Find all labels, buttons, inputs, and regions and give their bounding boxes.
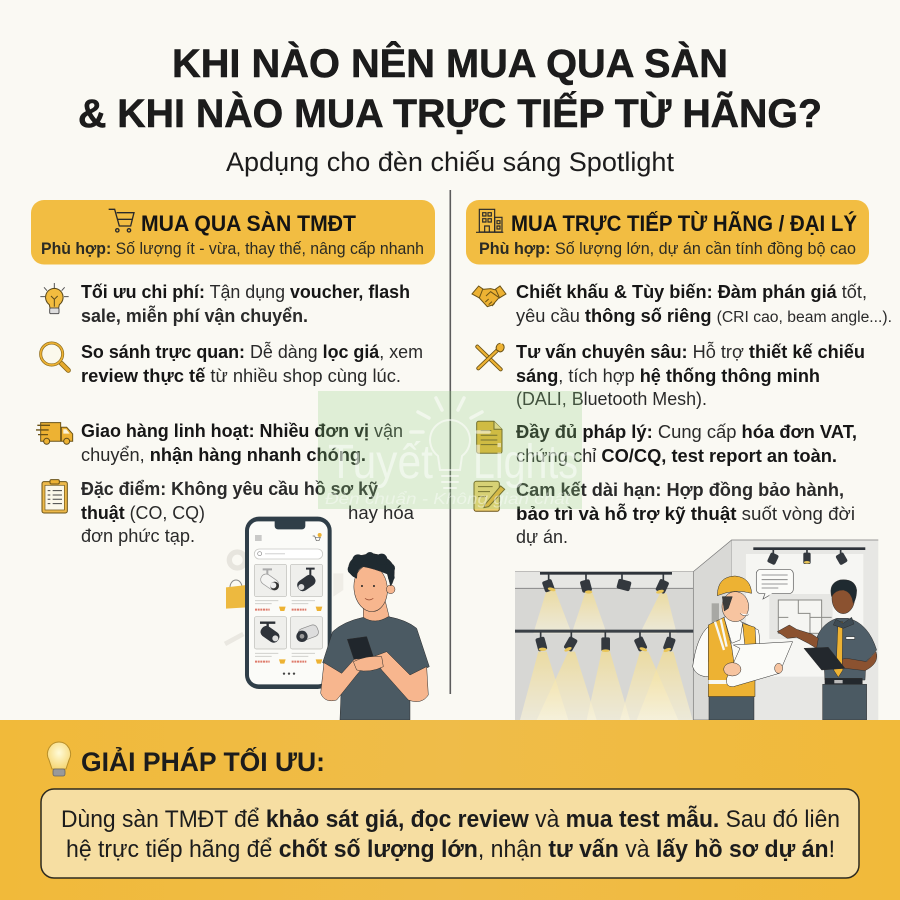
title: & KHI NÀO MUA TRỰC TIẾP TỪ HÃNG? [78, 90, 822, 136]
solution box [41, 789, 859, 878]
panel: right header: MUA TRỰC TIẾP TỪ HÃNG / ĐẠI LÝ [511, 211, 857, 236]
person [321, 552, 429, 720]
panel: left benefits list: hay hóa [348, 503, 415, 523]
benefit text: long term: Cam kết dài hạn: Hợp đồng bảo hành, [516, 480, 844, 500]
benefit text: discount: Chiết khấu & Tùy biến: Đàm phán giá tốt, [516, 282, 867, 302]
solution heading: GIẢI PHÁP TỐI ƯU: [81, 745, 325, 777]
track rails [515, 547, 865, 633]
icon: building [476, 209, 503, 232]
center divider [450, 190, 451, 694]
panel: left benefits list: thuật (CO, CQ) [81, 503, 205, 523]
watermark logo: Tuyết [328, 436, 433, 489]
panel: right benefits list: yêu cầu thông số riêng (CRI cao, beam angle...). [516, 306, 892, 326]
icon: document [477, 421, 502, 453]
product spotlights [259, 569, 320, 645]
panel: right benefits list: dự án. [516, 527, 568, 547]
panel: right header: Phù hợp: Số lượng lớn, dự án cần tính đồng bộ cao [479, 240, 856, 258]
track spotlights [535, 549, 848, 653]
icon: magnifier [41, 343, 68, 370]
panel: left header: MUA QUA SÀN TMĐT [141, 211, 356, 236]
room walls [515, 540, 878, 720]
icon: light bulb [40, 283, 69, 314]
icon: shopping cart [109, 209, 134, 232]
panel: right benefits list: (DALI, Bluetooth Mesh). [516, 389, 707, 409]
panel: right header [466, 200, 869, 264]
watermark logo: Lights [473, 436, 578, 489]
title [78, 40, 822, 136]
subtitle: Apdụng cho đèn chiếu sáng Spotlight [226, 147, 674, 177]
icon: note with pencil [474, 481, 505, 511]
panel: left benefits list [36, 282, 423, 546]
watermark bulb [411, 398, 489, 488]
light beams [520, 590, 693, 720]
panel: optimal solution band [0, 720, 900, 900]
solution box: hệ trực tiếp hãng để chốt số lượng lớn, nhận tư vấn và lấy hồ sơ dự án! [66, 836, 835, 863]
benefit text: legal: Đầy đủ pháp lý: Cung cấp hóa đơn VAT, [516, 422, 857, 442]
panel: right benefits list: chứng chỉ CO/CQ, test report an toàn. [516, 446, 837, 466]
illustration: showroom with engineer and consultant [515, 540, 878, 720]
icon: handshake [472, 286, 506, 307]
icon: glowing bulb [47, 742, 71, 776]
shopping bag [226, 580, 247, 609]
panel: left benefits list: đơn phức tạp. [81, 526, 195, 546]
benefit text: consulting: Tư vấn chuyên sâu: Hỗ trợ thiết kế chiếu [516, 341, 865, 362]
watermark logo [318, 391, 582, 509]
product cards [254, 564, 323, 649]
solution box: Dùng sàn TMĐT để khảo sát giá, đọc review và mua test mẫu. Sau đó liên [61, 805, 840, 833]
engineer [693, 576, 793, 720]
panel: left benefits list: chuyển, nhận hàng nhanh chóng. [81, 445, 366, 465]
benefit text: features: Đặc điểm: Không yêu cầu hồ sơ kỹ [81, 479, 378, 499]
floor plan [769, 594, 833, 639]
benefit text: compare: So sánh trực quan: Dễ dàng lọc giá, xem [81, 341, 423, 362]
icon: clipboard [42, 480, 67, 513]
benefit text: delivery: Giao hàng linh hoạt: Nhiều đơn vị vận [81, 421, 403, 441]
panel: right benefits list: sáng, tích hợp hệ thống thông minh [516, 366, 820, 386]
panel: left benefits list: sale, miễn phí vận chuyển. [81, 305, 308, 326]
phone [245, 517, 332, 689]
consultant [777, 580, 877, 720]
icon: tools [477, 343, 504, 369]
illustration: customer shopping on phone [225, 517, 429, 720]
title: KHI NÀO NÊN MUA QUA SÀN [172, 40, 728, 86]
panel: left benefits list: review thực tế từ nhiều shop cùng lúc. [81, 366, 401, 386]
speech bubble [756, 569, 793, 599]
benefit text: cost: Tối ưu chi phí: Tận dụng voucher, flash [81, 282, 410, 302]
watermark logo: Đèn chuẩn - Không gian chất [325, 490, 571, 508]
panel: left header: Phù hợp: Số lượng ít - vừa, thay thế, nâng cấp nhanh [41, 240, 424, 258]
faded background icons [225, 552, 343, 644]
icon: delivery truck [36, 423, 73, 444]
panel: right benefits list: bảo trì và hỗ trợ kỹ thuật suốt vòng đời [516, 503, 855, 524]
panel: left header [31, 200, 435, 264]
panel: right benefits list [472, 282, 892, 547]
product prices [255, 601, 322, 664]
